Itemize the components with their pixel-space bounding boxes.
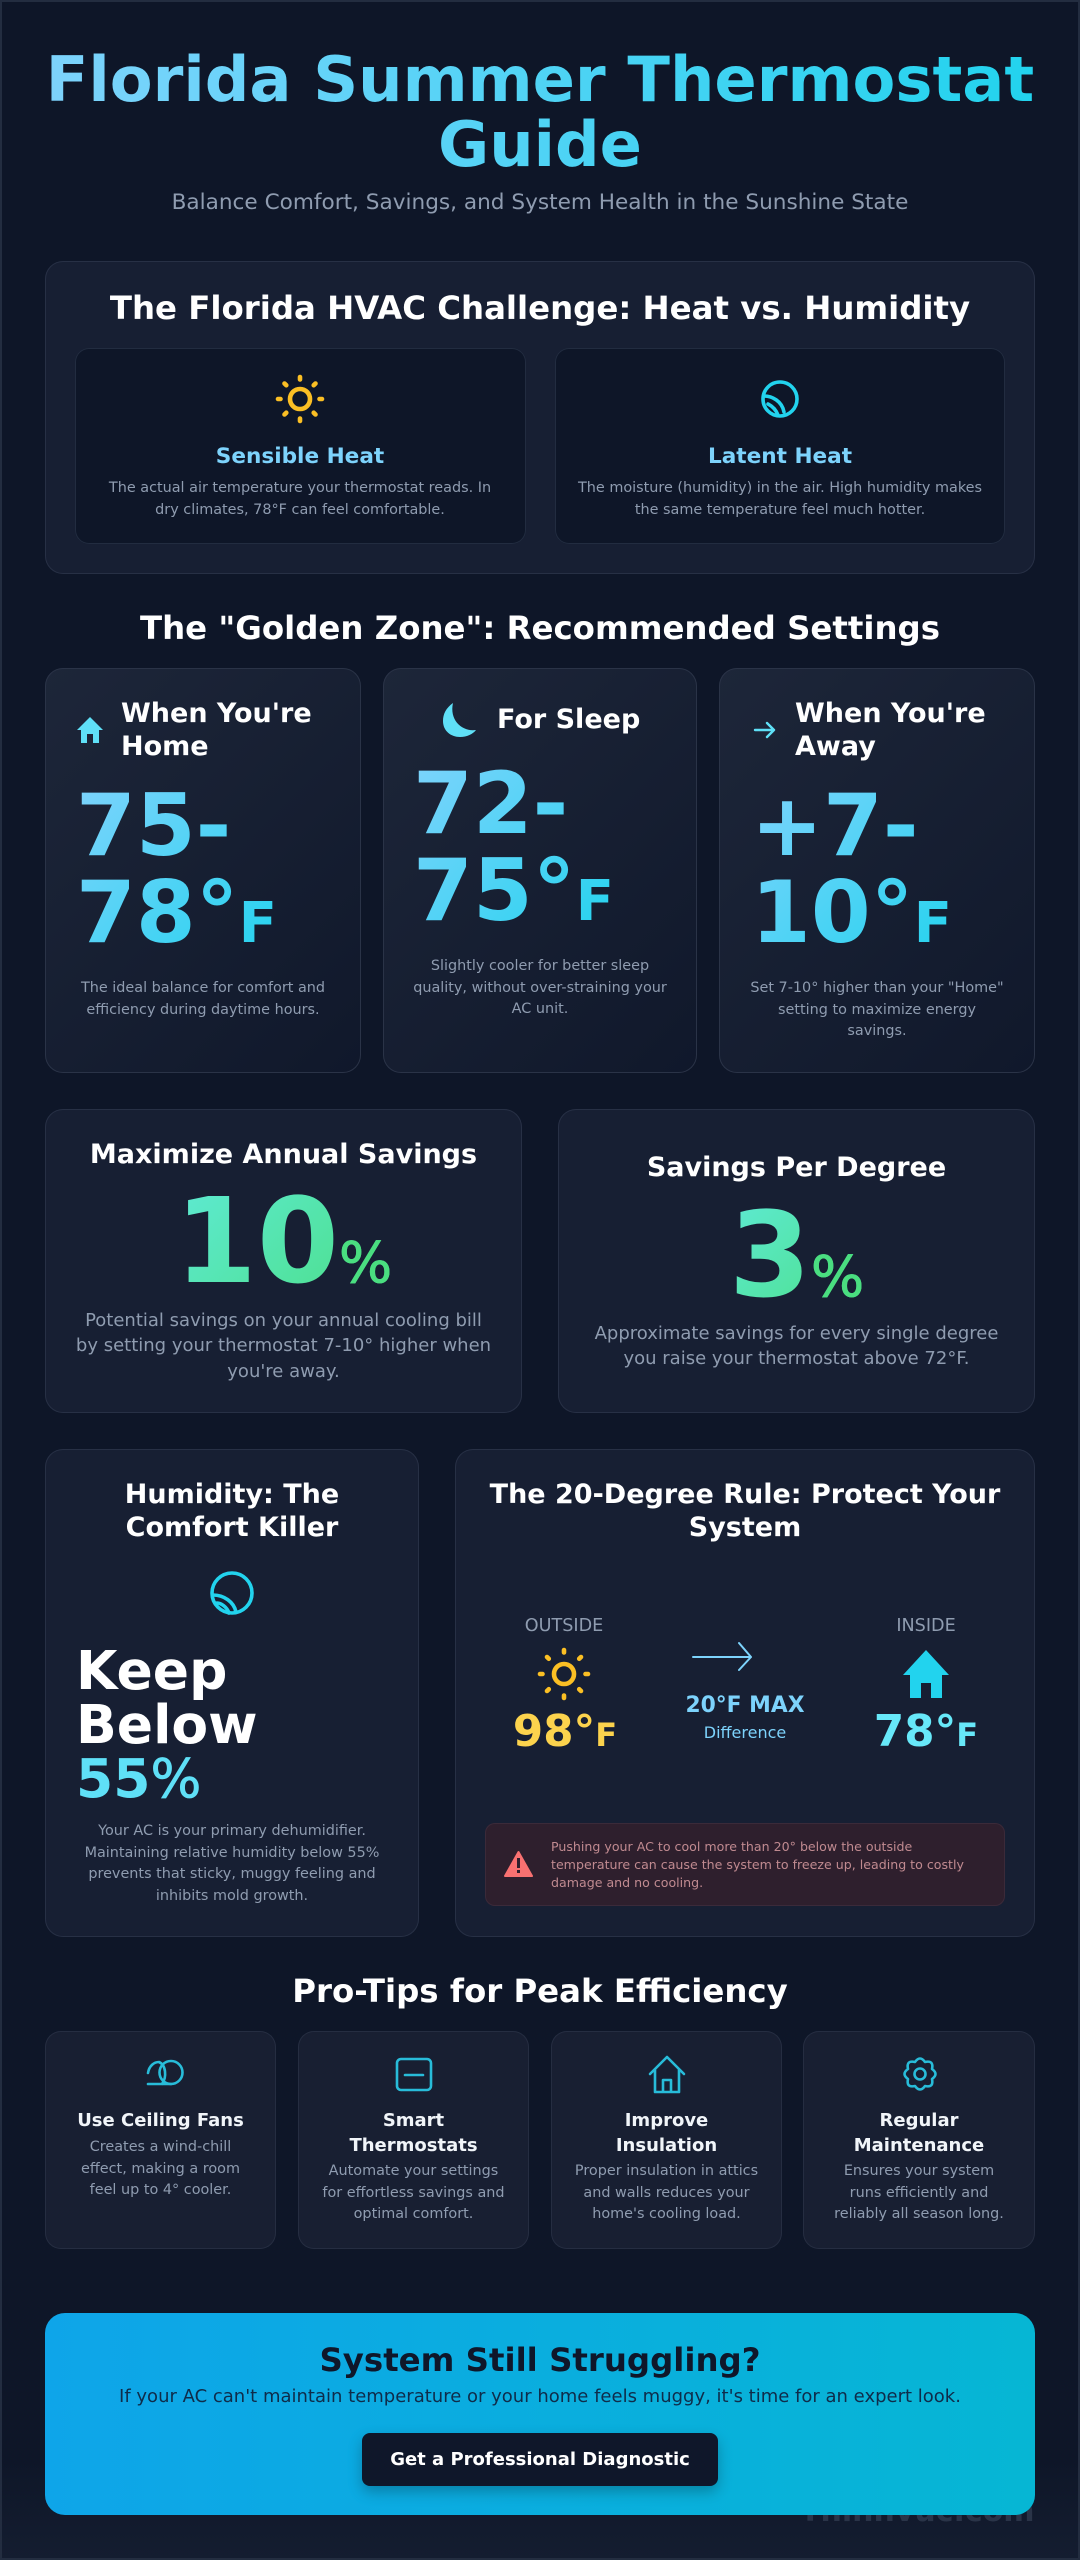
card: sleep: [383, 668, 697, 1073]
text: sleep: Slightly cooler for better sleep: [431, 958, 649, 974]
heading: annual savings: Maximize Annual Savings: [90, 1139, 477, 1170]
icon: house outline: [648, 2056, 686, 2094]
callout: keep below 55: [76, 1639, 258, 1810]
tip: maintenance: [803, 2031, 1035, 2249]
text: latent heat: The moisture (humidity) in the air. High humidity makes: [578, 480, 982, 496]
title: smart thermostats: [349, 2110, 478, 2156]
text: humidity: [85, 1823, 379, 1904]
text: ceiling fans: effect, making a room: [81, 2161, 240, 2177]
text: humidity: Maintaining relative humidity below 55%: [85, 1845, 379, 1861]
value: inside: 78°F: [874, 1707, 978, 1757]
title: smart thermostats: Thermostats: [349, 2135, 478, 2156]
stat: 10 percent: 10%: [175, 1172, 392, 1310]
icon: warning triangle: [504, 1851, 533, 1877]
text: warning: damage and no cooling.: [551, 1875, 703, 1890]
title: Guide: [438, 108, 642, 180]
icon: arrow: [754, 722, 776, 738]
heading: humidity: Humidity: The: [125, 1479, 339, 1510]
icon: sun: [276, 374, 324, 424]
text: warning: temperature can cause the system to freeze up, leading to costly: [551, 1857, 964, 1872]
heading: away: [795, 698, 986, 762]
icon: arrow: [692, 1642, 752, 1671]
heading: call to action: System Still Struggling?: [319, 2341, 761, 2379]
label: inside: INSIDE: [896, 1616, 956, 1636]
title: insulation: Improve: [625, 2110, 708, 2131]
card: annual savings: [45, 1109, 522, 1413]
text: humidity: Your AC is your primary dehumidifier.: [98, 1823, 366, 1839]
text: humidity: prevents that sticky, muggy feeling and: [88, 1866, 376, 1882]
text: maintenance: Ensures your system: [844, 2163, 994, 2179]
heading: golden zone: The "Golden Zone": Recommended Settings: [140, 609, 940, 647]
text: sleep: [413, 958, 667, 1017]
icon: moon: [443, 703, 476, 737]
value: away: +7-: [751, 776, 919, 876]
text: home: [80, 980, 325, 1018]
title: [46, 42, 1034, 180]
label: latent heat: Latent Heat: [708, 444, 852, 469]
heading: away: When You're: [795, 698, 986, 728]
value: home: [76, 776, 277, 962]
text: annual savings: [76, 1310, 491, 1382]
text: ceiling fans: [81, 2139, 240, 2198]
value: home: 78°F: [76, 862, 277, 962]
text: sensible heat: [108, 480, 491, 518]
title: insulation: [616, 2110, 717, 2156]
text: insulation: Proper insulation in attics: [575, 2163, 758, 2179]
icon: fan: [146, 2060, 184, 2086]
callout: keep below 55: Below: [76, 1693, 258, 1756]
label: sensible heat: Sensible Heat: [216, 444, 384, 469]
text: sleep: AC unit.: [512, 1001, 568, 1017]
card: 20 degree rule: [455, 1449, 1035, 1937]
heading: 20 degree rule: System: [689, 1512, 801, 1543]
tip: ceiling fans: [45, 2031, 276, 2249]
text: away: savings.: [847, 1023, 907, 1039]
icon: humidity drop: [761, 380, 799, 418]
value: away: [751, 776, 952, 962]
watermark: Thinhvuc.com: [800, 2494, 1035, 2528]
title: maintenance: Maintenance: [854, 2135, 984, 2156]
heading: home: When You're: [121, 698, 312, 728]
text: away: [750, 980, 1004, 1039]
text: smart thermostats: optimal comfort.: [354, 2206, 473, 2222]
title: ceiling fans: Use Ceiling Fans: [77, 2110, 244, 2131]
text: ceiling fans: Creates a wind-chill: [90, 2139, 231, 2155]
icon: home: [77, 717, 103, 743]
text: annual savings: by setting your thermostat 7-10° higher when: [76, 1335, 491, 1356]
value: sleep: [413, 754, 614, 940]
text: latent heat: the same temperature feel much hotter.: [635, 502, 925, 518]
heading: humidity: [125, 1479, 339, 1543]
value: outside: 98°F: [513, 1707, 617, 1757]
text: per degree: you raise your thermostat above 72°F.: [623, 1348, 970, 1369]
card: sensible heat: [75, 348, 526, 544]
text: smart thermostats: [322, 2163, 505, 2222]
text: smart thermostats: for effortless savings and: [322, 2185, 505, 2201]
title: maintenance: Regular: [880, 2110, 958, 2131]
button: diagnostic: [362, 2433, 718, 2486]
card: humidity: [45, 1449, 419, 1937]
icon: humidity drop: [210, 1571, 254, 1615]
text: annual savings: Potential savings on your annual cooling bill: [85, 1310, 482, 1331]
text: away: Set 7-10° higher than your "Home": [750, 980, 1004, 996]
heading: sleep: For Sleep: [497, 704, 640, 735]
card: away: [719, 668, 1035, 1073]
text: sensible heat: dry climates, 78°F can feel comfortable.: [155, 502, 445, 518]
panel: HVAC challenge: [45, 261, 1035, 574]
text: annual savings: you're away.: [227, 1361, 340, 1382]
text: home: efficiency during daytime hours.: [86, 1002, 320, 1018]
title: Florida Summer Thermostat: [46, 42, 1034, 116]
text: insulation: and walls reduces your: [583, 2185, 750, 2201]
text: latent heat: [578, 480, 982, 518]
text: humidity: inhibits mold growth.: [156, 1888, 308, 1904]
panel: call to action: [45, 2313, 1035, 2515]
label: outside: OUTSIDE: [525, 1616, 603, 1636]
heading: humidity: Comfort Killer: [126, 1512, 338, 1543]
title: insulation: Insulation: [616, 2135, 717, 2156]
icon: house inside: [903, 1650, 949, 1698]
text: call to action: If your AC can't maintain temperature or your home feels muggy, it's time for an expert look.: [119, 2386, 961, 2407]
heading: pro-tips: Pro-Tips for Peak Efficiency: [292, 1972, 788, 2010]
callout: warning: [485, 1823, 1005, 1906]
card: when home: [45, 668, 361, 1073]
card: latent heat: [555, 348, 1005, 544]
tip: smart thermostats: [298, 2031, 529, 2249]
value: home: 75-: [76, 776, 231, 876]
heading: 20 degree rule: The 20-Degree Rule: Protect Your: [490, 1479, 1000, 1510]
heading: home: [121, 698, 312, 762]
text: sleep: quality, without over-straining your: [413, 980, 667, 996]
title: smart thermostats: Smart: [383, 2110, 444, 2131]
text: maintenance: reliably all season long.: [834, 2206, 1004, 2222]
text: per degree: [594, 1323, 998, 1369]
stat: 3 percent: 3%: [729, 1186, 864, 1324]
title: maintenance: [803, 2108, 1035, 2158]
heading: home: Home: [121, 730, 209, 762]
text: away: setting to maximize energy: [778, 1002, 976, 1018]
callout: keep below 55: 55%: [76, 1747, 201, 1810]
value: sleep: 72-: [413, 754, 568, 854]
heading: away: Away: [795, 730, 876, 762]
icon: gear: [900, 2054, 940, 2094]
icon: sun outside: [538, 1648, 590, 1700]
text: smart thermostats: Automate your settings: [329, 2163, 498, 2179]
heading: per degree: Savings Per Degree: [647, 1152, 946, 1182]
tip: insulation: [551, 2031, 782, 2249]
callout: keep below 55: Keep: [76, 1639, 227, 1702]
label: difference: Difference: [704, 1723, 786, 1742]
text: ceiling fans: feel up to 4° cooler.: [90, 2182, 231, 2198]
value: max difference: 20°F MAX: [685, 1693, 805, 1718]
heading: 20 degree rule: [490, 1479, 1000, 1543]
text: home: The ideal balance for comfort and: [81, 980, 325, 996]
button: diagnostic: Get a Professional Diagnostic: [390, 2449, 690, 2470]
text: maintenance: [803, 2161, 1035, 2226]
card: savings per degree: [558, 1109, 1035, 1413]
text: sensible heat: The actual air temperature your thermostat reads. In: [109, 480, 491, 496]
subtitle: Balance Comfort, Savings, and System Health in the Sunshine State: [172, 190, 908, 215]
text: insulation: [575, 2163, 758, 2222]
text: maintenance: runs efficiently and: [850, 2185, 988, 2201]
heading: challenge: The Florida HVAC Challenge: Heat vs. Humidity: [110, 289, 970, 327]
text: per degree: Approximate savings for every single degree: [595, 1323, 998, 1344]
text: warning: [551, 1839, 964, 1890]
icon: thermostat: [396, 2058, 432, 2092]
text: warning: Pushing your AC to cool more than 20° below the outside: [551, 1839, 912, 1854]
value: sleep: 75°F: [413, 840, 614, 940]
value: away: 10°F: [751, 862, 952, 962]
text: insulation: home's cooling load.: [592, 2206, 741, 2222]
